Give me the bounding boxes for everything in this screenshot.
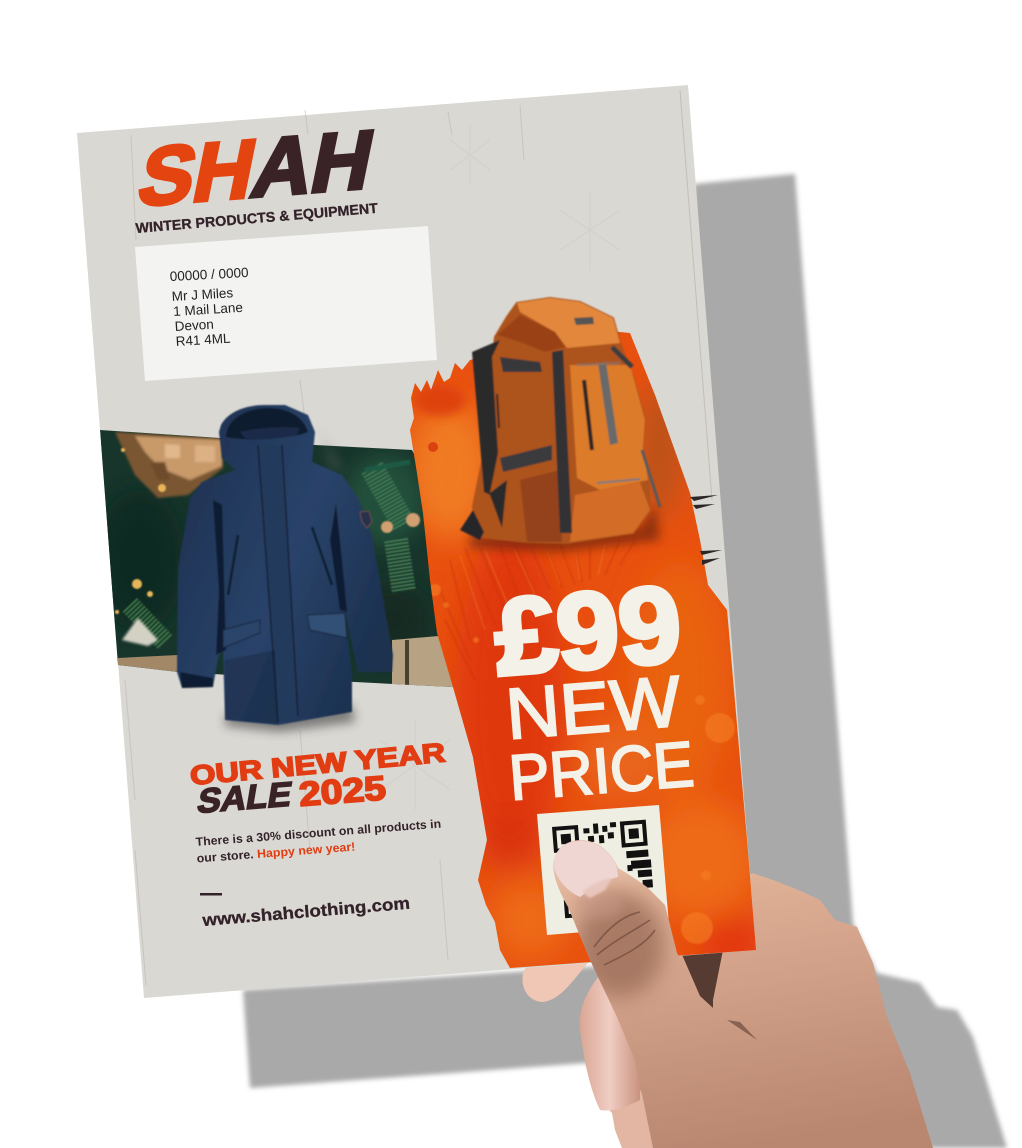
body copy: There is a 30% discount on all products in — [195, 817, 442, 849]
OUR NEW YEAR: OUR NEW YEAR — [189, 737, 446, 791]
pocket flaps — [223, 620, 260, 648]
bottom pocket — [570, 482, 650, 542]
QR code — [537, 805, 669, 935]
address lines: R41 4ML — [175, 331, 231, 349]
logo — [131, 112, 382, 236]
red blotches at brush edge — [414, 384, 466, 416]
backpack shadow — [470, 505, 660, 552]
third finger — [600, 1090, 680, 1148]
photo band: christmas tree — [95, 430, 470, 690]
thumb and lower hand over flyer — [553, 840, 757, 1148]
thumbnail — [553, 841, 618, 897]
logo tagline: WINTER PRODUCTS & EQUIPMENT — [135, 200, 379, 236]
address lines — [171, 285, 243, 349]
second finger — [580, 977, 640, 1111]
snow on branch — [122, 618, 158, 646]
shoulder strap — [472, 340, 507, 528]
web shadow between thumb and hand — [680, 950, 723, 1008]
nail highlight — [582, 878, 612, 898]
wooden base — [392, 636, 453, 688]
lower shade — [225, 650, 278, 724]
snowflake texture — [380, 125, 620, 810]
foliage needles — [130, 462, 410, 642]
orange brush panel — [405, 330, 760, 968]
body copy — [195, 817, 442, 865]
label — [574, 317, 594, 325]
address window — [135, 226, 437, 381]
jacket — [177, 405, 393, 732]
wrist crease — [727, 1020, 757, 1040]
brush streak marks — [690, 495, 722, 565]
lid top — [517, 298, 620, 348]
dark corner — [460, 510, 484, 540]
reference number: 00000 / 0000 — [169, 265, 249, 284]
NEW: NEW — [503, 661, 684, 755]
thumb knuckle shading — [576, 891, 664, 997]
sleeve gaps — [180, 500, 347, 688]
chest zips — [228, 527, 332, 595]
hood opening — [226, 408, 308, 439]
back of hand — [600, 873, 933, 1148]
compression straps — [500, 445, 552, 472]
logo wordmark SHAH: SHAH — [131, 112, 382, 224]
wood grain lines — [125, 90, 712, 985]
central strap — [552, 350, 572, 533]
fairy lights — [115, 448, 166, 614]
price amount: £99 — [490, 563, 685, 698]
address lines: Devon — [174, 317, 214, 334]
side straps — [612, 347, 632, 367]
disco ball — [115, 432, 223, 498]
sale headline — [189, 737, 446, 821]
flyer — [77, 85, 760, 998]
body copy: our store. Happy new year! — [196, 840, 356, 865]
drop shadow of flyer and hand — [243, 174, 1007, 1148]
fibre strokes — [440, 540, 635, 680]
address lines: 1 Mail Lane — [173, 300, 243, 319]
hood lining — [240, 427, 300, 439]
grey strap — [598, 362, 618, 445]
knuckle creases — [594, 912, 655, 965]
website URL: www.shahclothing.com — [201, 894, 411, 930]
backpack — [460, 298, 660, 552]
zips — [584, 380, 592, 450]
address lines: Mr J Miles — [171, 285, 234, 304]
lower left shade — [520, 470, 562, 542]
2025: 2025 — [298, 769, 387, 814]
flyer paper background — [77, 85, 756, 998]
sleeve badge — [360, 511, 372, 528]
jacket shadow — [225, 705, 355, 732]
lid shadow — [497, 315, 565, 352]
index fingertip — [522, 958, 590, 1002]
paint blobs — [405, 380, 760, 965]
price — [490, 563, 697, 814]
jacket silhouette — [177, 405, 393, 725]
right body panel — [570, 365, 648, 490]
SALE: SALE — [195, 776, 295, 821]
divider dash — [200, 893, 222, 896]
placket — [258, 445, 298, 722]
hand behind flyer — [522, 873, 933, 1148]
PRICE: PRICE — [506, 728, 697, 814]
backpack body — [473, 298, 650, 543]
